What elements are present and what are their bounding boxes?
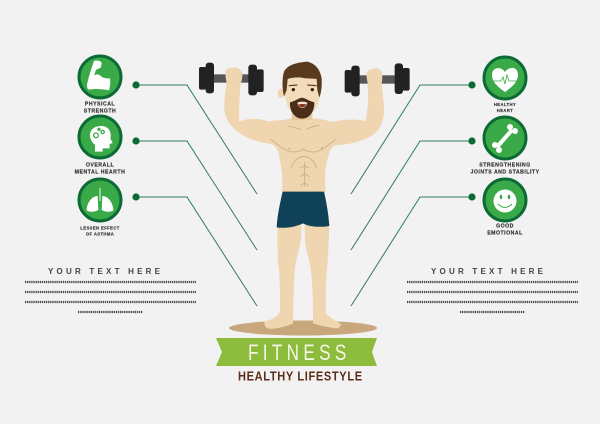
icon: bone [492,124,518,153]
ear [278,89,284,98]
chest and abs detail [271,125,336,187]
dumbbell right [345,63,410,96]
label: of asthma: OF ASTHMA [86,232,114,236]
label: strengthening: STRENGTHENING [479,162,531,168]
dumbbell left [199,63,264,95]
left placeholder lines [25,282,196,312]
eyebrows [289,83,317,87]
left connector lines [132,81,257,306]
label: emotional: EMOTIONAL [487,230,523,236]
beard [290,98,314,119]
mouth [297,102,307,108]
label: joints and stability: JOINTS AND STABILITY [470,170,540,176]
floor ellipse [229,320,377,336]
badge: healthy heart [484,57,526,99]
figure: head [278,62,322,120]
subtitle: healthy lifestyle: HEALTHY LIFESTYLE [238,369,362,384]
label: heart: HEART [497,108,513,113]
badge: bone [484,117,526,159]
shorts [277,191,329,228]
banner ribbon [216,338,377,366]
hair [282,62,322,98]
right connector lines [351,81,476,306]
badge: physical strength [79,56,121,98]
label: mental hearth: MENTAL HEARTH [75,170,125,176]
label: healthy: HEALTHY [494,102,516,107]
right heading: YOUR TEXT HERE [431,267,544,276]
torso and arms [224,83,384,192]
eyes [292,88,314,91]
badge: mental health [79,116,121,158]
title: fitness: FITNESS [248,341,346,366]
icon: gears [94,128,104,138]
label: strength: STRENGTH [84,108,116,114]
figure: upper body [199,63,410,192]
legs and feet [264,225,301,329]
badge: emotional [484,179,526,221]
right placeholder lines [407,282,578,312]
badge: lungs [79,179,121,221]
icon: heart [492,68,518,92]
icon: smiley [494,190,516,212]
label: good: GOOD [496,224,514,230]
neck [292,105,312,120]
hands [225,67,242,85]
icon: flexed arm [87,61,110,90]
label: physical: PHYSICAL [85,102,115,108]
icon: head with gears [90,126,113,152]
icon: lungs [87,196,113,212]
figure: lower body [264,191,341,329]
label: overall: OVERALL [86,162,114,168]
label: lessen effect: LESSEN EFFECT [80,226,120,230]
face [285,75,319,117]
icon: pulse line [492,75,518,84]
left heading: YOUR TEXT HERE [48,267,161,276]
icon: trachea [99,188,101,201]
